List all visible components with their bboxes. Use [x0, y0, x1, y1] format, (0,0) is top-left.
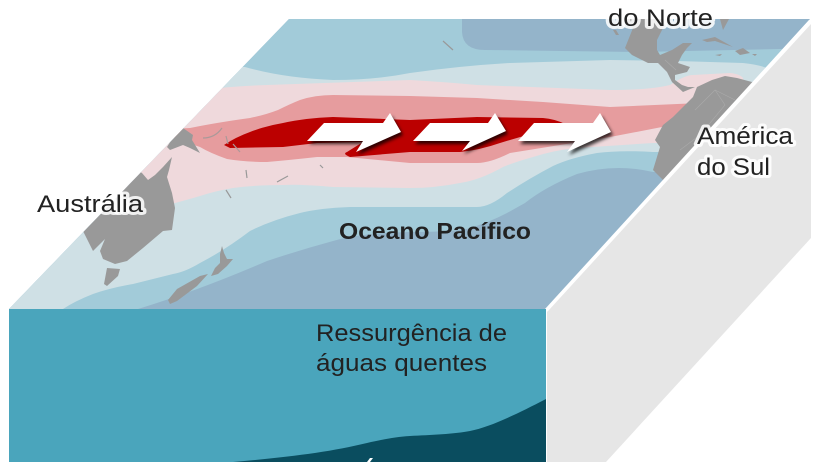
Australia — [84, 157, 175, 264]
arrows: warm water flowing east — [307, 113, 611, 152]
pale pink warm band — [122, 73, 744, 204]
label: warm water upwelling: Ressurgência de — [316, 320, 507, 347]
Pacific islands — [203, 41, 453, 198]
panel: ocean surface map — [9, 19, 810, 309]
label: do Norte: do Norte — [608, 5, 713, 32]
label: América do Sul — [697, 123, 794, 181]
mid red warm band — [150, 95, 700, 163]
label: América do Sul: do Sul — [697, 154, 770, 181]
pale blue temperature band — [0, 60, 820, 309]
Tasmania — [104, 268, 120, 286]
New Zealand north island — [211, 246, 233, 276]
North and Central America — [622, 19, 695, 92]
deep blue cool region — [9, 19, 810, 309]
panel: right side face of ocean block — [547, 24, 811, 462]
warm upper water layer — [9, 309, 546, 462]
dark red hottest zone — [224, 117, 565, 157]
panel: front cross-section of ocean — [9, 309, 546, 462]
arrow 2 — [413, 113, 506, 151]
Caribbean islands — [702, 19, 757, 56]
white edge between surface and side — [545, 20, 812, 311]
accent mark of the label cropped by the frame — [367, 458, 373, 462]
label: warm water upwelling: águas quentes — [316, 350, 487, 377]
label: warm water upwelling — [316, 320, 507, 377]
New Zealand south island — [168, 274, 208, 304]
label: Austrália: Austrália — [37, 191, 144, 218]
blue temperature band — [9, 19, 782, 309]
Baja California — [613, 30, 619, 35]
South America — [653, 76, 752, 180]
label: Oceano Pacífico: Oceano Pacífico — [339, 218, 531, 244]
New Guinea — [167, 128, 200, 153]
land masses — [60, 19, 770, 304]
cold deep water layer — [233, 399, 546, 462]
arrow 1 — [307, 113, 401, 152]
arrow 3 — [518, 113, 611, 152]
country borders — [665, 60, 735, 150]
label: América do Sul: América — [697, 123, 794, 150]
